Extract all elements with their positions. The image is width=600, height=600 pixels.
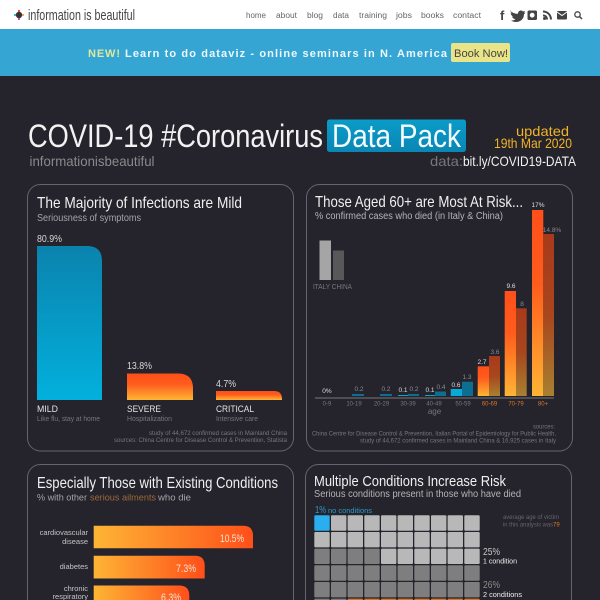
bar: severe xyxy=(127,361,193,423)
bar: cardiovascular disease xyxy=(40,526,253,548)
average age note: in this analysis was xyxy=(503,522,553,528)
value labels: 0.1 xyxy=(398,387,408,394)
button: book now: Book Now! xyxy=(454,48,508,60)
value labels: 0.2 xyxy=(381,386,391,393)
bar: critical: Intensive care xyxy=(216,416,258,423)
navigation links: data xyxy=(333,11,350,20)
navigation links: contact xyxy=(453,11,482,20)
no conditions label: no conditions xyxy=(328,506,372,515)
value labels: 0% xyxy=(322,388,332,395)
promo banner: Learn to do dataviz - online seminars in N. America xyxy=(125,48,448,60)
bar: chronic respiratory xyxy=(53,584,189,600)
site name: information is beautiful xyxy=(28,7,135,24)
bar: cardiovascular disease: 10.5% xyxy=(220,533,244,545)
age axis labels: age xyxy=(428,407,442,416)
value labels: 0.6 xyxy=(451,382,461,389)
bar: mild: MILD xyxy=(37,404,58,415)
legend xyxy=(313,240,352,291)
age axis labels: 20-29 xyxy=(374,402,390,408)
data link xyxy=(430,153,577,169)
heading: Especially Those with Existing Conditions xyxy=(37,475,278,492)
label: 1 condition: 25% xyxy=(483,547,500,558)
value labels xyxy=(322,202,561,395)
age axis labels: 30-39 xyxy=(400,402,416,408)
bar: critical xyxy=(216,379,282,423)
value labels: 0.1 xyxy=(425,387,435,394)
label: 1 condition xyxy=(483,547,517,566)
heading: Those Aged 60+ are Most At Risk... xyxy=(315,194,523,211)
age axis labels: 0-9 xyxy=(323,402,332,408)
bar: diabetes xyxy=(60,556,205,578)
source note: sources: China Centre for Disease Control & Prevention, Statista xyxy=(114,438,288,444)
updated date: updated xyxy=(516,123,569,139)
age axis labels: 40-49 xyxy=(426,402,442,408)
navigation links: home xyxy=(246,11,267,20)
promo banner xyxy=(0,29,600,76)
bar: critical: 4.7% xyxy=(216,379,236,390)
legend: ITALY CHINA xyxy=(313,284,352,291)
bar: severe: 13.8% xyxy=(127,361,152,372)
bar: mild: 80.9% xyxy=(37,234,62,245)
average age note: 79 xyxy=(553,522,560,528)
average age note: average age of victim xyxy=(503,515,559,521)
age axis labels: 50-59 xyxy=(455,402,471,408)
source note: study of 44,672 confirmed cases in Mainland China xyxy=(149,431,288,437)
navigation links: jobs xyxy=(395,11,412,20)
source note xyxy=(312,424,556,444)
value labels: 2.7 xyxy=(477,359,487,366)
heading: Multiple Conditions Increase Risk xyxy=(314,473,506,490)
promo banner: NEW! xyxy=(88,48,120,60)
subheading: serious ailments xyxy=(90,492,156,504)
source note: study of 44,672 confirmed cases in Mainland China & 16,925 cases in Italy xyxy=(360,438,556,444)
age axis labels xyxy=(323,402,549,416)
label: 2 conditions: 26% xyxy=(483,580,500,591)
no conditions label: 1% xyxy=(315,505,326,516)
bar: diabetes: diabetes xyxy=(60,562,88,571)
heading: The Majority of Infections are Mild xyxy=(37,195,242,212)
bar: severe: Hospitalization xyxy=(127,416,172,423)
brand line: informationisbeautiful xyxy=(30,153,154,169)
button: book now xyxy=(451,43,510,62)
data pack badge: Data Pack xyxy=(332,118,462,154)
bar: mild xyxy=(37,234,102,423)
average age note xyxy=(503,515,560,528)
updated date: 19th Mar 2020 xyxy=(494,135,572,151)
navigation bar xyxy=(0,0,600,29)
age axis labels: 80+ xyxy=(538,402,549,408)
navigation links xyxy=(246,11,482,20)
grouped bar chart xyxy=(315,202,561,416)
subheading: % with other xyxy=(37,492,87,504)
subheading: % confirmed cases who died (in Italy & China) xyxy=(315,211,503,222)
value labels: 14.8% xyxy=(543,227,561,234)
subheading xyxy=(37,492,191,504)
title: COVID-19 #Coronavirus xyxy=(28,118,323,154)
source note xyxy=(114,431,288,444)
source note: sources: xyxy=(533,424,555,430)
age axis labels: 70-79 xyxy=(508,402,524,408)
label: 1 condition: 1 condition xyxy=(483,556,517,566)
bar: cardiovascular disease: disease xyxy=(62,537,88,546)
data link: data: xyxy=(430,153,463,169)
value labels: 3.6 xyxy=(490,349,500,356)
bar: cardiovascular disease: cardiovascular xyxy=(40,528,88,537)
subheading: Seriousness of symptoms xyxy=(37,213,141,224)
bar: mild: Like flu, stay at home xyxy=(37,416,100,423)
navigation links: training xyxy=(359,11,387,20)
no conditions label xyxy=(315,505,372,516)
value labels: 0.4 xyxy=(436,384,446,391)
label: 2 conditions: 2 conditions xyxy=(483,590,522,599)
panel: existing conditions xyxy=(28,464,294,600)
label: 2 conditions xyxy=(483,580,522,599)
updated date xyxy=(494,123,572,151)
panel: infections are mild xyxy=(28,184,294,451)
social icons: f xyxy=(500,8,505,23)
subheading: Serious conditions present in those who have died xyxy=(314,489,521,500)
age axis labels: 60-69 xyxy=(482,402,498,408)
panel: multiple conditions xyxy=(306,464,572,600)
bar: severe: SEVERE xyxy=(127,404,161,415)
age axis labels: 10-19 xyxy=(346,402,362,408)
navigation links: about xyxy=(276,11,298,20)
subheading: who die xyxy=(157,492,191,504)
bar: diabetes: 7.3% xyxy=(176,563,196,575)
waffle chart xyxy=(314,515,480,600)
value labels: 0.2 xyxy=(409,386,419,393)
navigation links: books xyxy=(421,11,444,20)
bar: critical: CRITICAL xyxy=(216,404,254,415)
value labels: 1.3 xyxy=(462,374,472,381)
navigation links: blog xyxy=(307,11,323,20)
title xyxy=(28,118,577,169)
social icons xyxy=(500,8,582,23)
data link: bit.ly/COVID19-DATA xyxy=(463,153,577,169)
value labels: 9.6 xyxy=(506,283,516,290)
value labels: 17% xyxy=(531,202,545,209)
value labels: 8 xyxy=(520,301,524,308)
icon: site logo xyxy=(14,10,24,20)
value labels: 0.2 xyxy=(354,386,364,393)
source note: China Centre for Disease Control & Prevention, Italian Portal of Epidemiology for Public Health, xyxy=(312,432,556,438)
panel: aged 60+ at risk xyxy=(306,184,572,451)
bar: chronic respiratory: chronic xyxy=(64,584,88,593)
